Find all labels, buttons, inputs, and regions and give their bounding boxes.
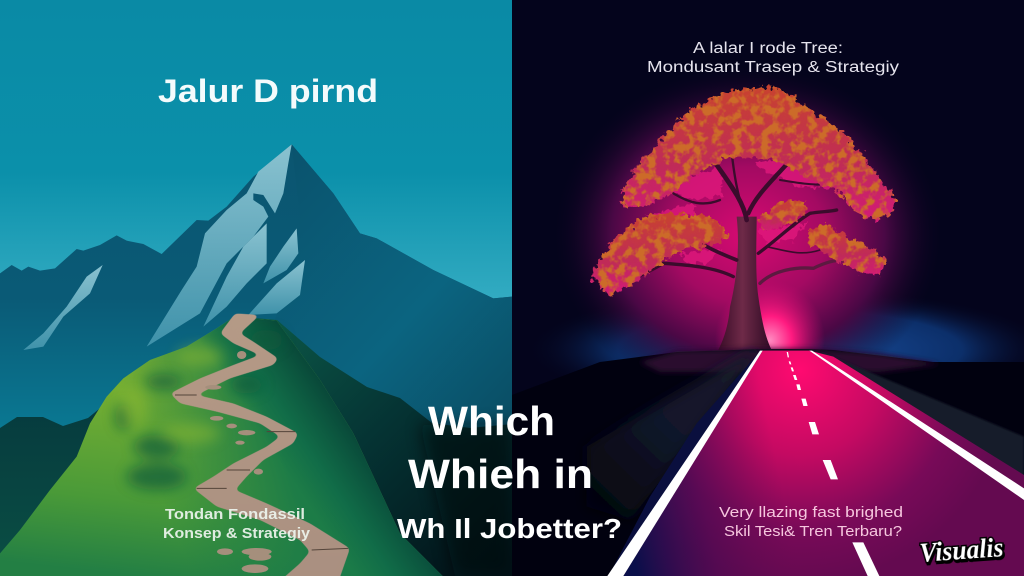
road left shade [623,351,833,576]
left road line [607,351,763,576]
tree illustration [593,87,898,350]
trunk [718,217,772,350]
grass right-side shadow [0,317,447,576]
right road line [809,351,1024,500]
left panel caption: Konsep & Strategiy [163,525,311,542]
branches [617,143,843,283]
heading: left panel title: Jalur D pirnd [158,73,378,109]
left dark fade toward centre [420,424,512,576]
right panel caption: Skil Tesi& Tren Terbaru? [724,523,902,540]
night background [512,0,1024,576]
path stones [205,351,272,573]
right shoulder [820,353,1024,480]
ground crest [640,349,940,372]
panel: right road and tree scene [512,0,1024,576]
right panel caption [719,504,903,540]
panel: left mountain scene [0,0,512,576]
centre dashes [787,352,879,576]
centre question heading: Whieh in [408,451,593,497]
inner pink blossoms [643,153,833,263]
logo: Visualis: Visualis [918,532,1004,568]
dark ground [512,349,1024,576]
blue horizon glow [525,288,1024,412]
right panel caption: Very llazing fast brighed [719,504,903,521]
base glow [715,280,825,400]
sky background [0,0,512,576]
heading: right panel title [647,40,899,76]
dark back hills [0,400,110,576]
green hill [0,313,447,576]
snow facets [23,144,305,350]
road illustration [587,351,1024,576]
grass shading [115,330,283,490]
left shoulder [587,352,760,520]
winding stone path [170,313,350,576]
pink tree glow [553,65,943,405]
left navy verge [610,351,763,573]
left panel caption: Tondan Fondassil [165,506,305,523]
foliage [593,87,898,295]
left panel caption [163,506,311,542]
centre question heading [397,398,622,544]
heading: right panel title: A lalar I rode Tree: [693,40,843,57]
dark green shoulder [255,318,512,576]
centre question heading: Which [428,398,555,444]
centre question heading: Wh Il Jobetter? [397,513,622,544]
mountain range [0,144,512,450]
grass mid green [0,317,447,576]
heading: right panel title: Mondusant Trasep & Strategiy [647,59,899,76]
road surface [623,351,1024,576]
